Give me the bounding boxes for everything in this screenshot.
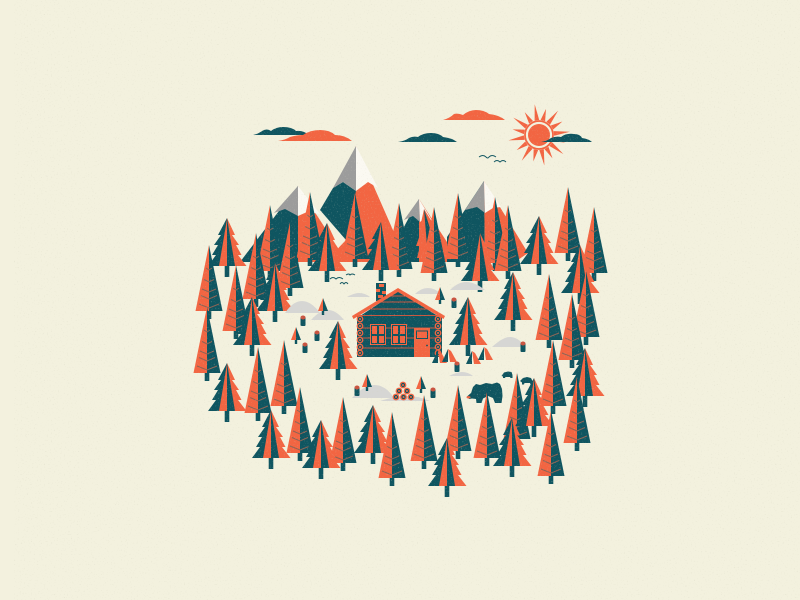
tree: fir [566,348,604,407]
bear cub [502,372,512,378]
mountain: small right [385,199,460,262]
cloud: orange left [278,130,352,141]
chimney [376,283,386,301]
tree: pine [378,412,406,486]
mountain: tall centre [320,146,407,262]
tree: fir [494,272,532,331]
tree: fir [319,321,358,380]
small tree [362,374,372,391]
mountains [240,146,528,262]
tree: pine [504,373,530,447]
tree: fir [561,245,600,304]
tree: pine [580,207,608,281]
tree: pine [410,395,438,469]
sun [508,104,570,166]
snow mound [415,288,441,294]
snow mound [352,385,394,398]
tree: fir [354,405,392,464]
tree: pine [194,307,220,381]
tree: pine [494,205,522,279]
tree: pine [482,197,508,271]
tree: jagged behind pine [416,209,434,258]
snow mound [285,301,320,313]
tree: pine [276,222,304,296]
tree: pine [558,294,586,368]
stump [430,388,436,398]
stump [520,342,526,352]
snow mound [450,282,485,290]
tree: pine [444,193,472,267]
tree: pine [386,203,412,277]
tree: pine [474,392,500,466]
log lines [357,296,441,348]
stump [452,298,456,308]
snow mound [449,372,473,376]
birds upper right [479,156,506,162]
small tree [291,327,301,344]
tree: pine [330,397,356,471]
tree: fir [256,263,294,322]
tree: pine [242,233,270,307]
birds near cabin [330,274,355,284]
tree: fir [461,233,500,292]
tree: fir [308,223,346,282]
stump [454,362,460,372]
mountain: left [240,186,347,262]
tree: pine [342,193,368,267]
small tree [318,298,328,315]
tree: fir [493,418,532,477]
window right [391,324,407,345]
tree: fir [428,438,466,497]
small fir cluster [432,347,493,364]
log cabin [352,283,445,357]
tree: pine [286,387,314,461]
tree: fir [449,297,488,356]
tree: fir [515,378,554,437]
roof [352,288,445,319]
tree: pine [554,187,582,261]
tree: pine [420,207,448,281]
tree: fir [233,297,272,356]
tree: fir [302,420,340,479]
tree: fir [208,218,246,277]
small tree [435,287,445,304]
tree: pine [540,340,566,414]
tree: pine [444,385,472,459]
snow mound [492,337,526,347]
tree: fir [208,363,246,422]
stump [302,342,308,353]
cloud: dark top-left [253,127,309,135]
tree: fir [520,216,558,275]
bear cub [520,377,532,384]
tree: pine [270,340,298,414]
tree: pine [196,245,222,319]
small tree [416,376,426,393]
roof gable [357,291,441,318]
snow mound [347,293,370,297]
snow mound [311,310,344,320]
tree: pine [536,274,562,348]
stump [300,316,306,326]
mountain: right [447,181,528,262]
snow mound [380,396,430,401]
cloud: dark centre [398,133,457,142]
tree: pine [296,192,324,266]
log ends [357,316,441,356]
cloud: orange centre [443,110,505,120]
cloud: dark over sun [541,134,592,142]
stump [314,330,320,341]
tree: fir [362,222,400,281]
door [414,328,430,357]
window left [370,324,386,345]
tree: pine [256,205,284,279]
bear [466,382,502,403]
tree: pine [564,377,590,451]
tree: pine [222,265,250,339]
tree: pine [572,271,600,345]
tree: pine [538,410,564,484]
cabin wall [357,316,442,357]
tree: fir [252,410,290,469]
log pile [393,382,414,400]
stump [354,386,360,396]
tree: pine [244,347,272,421]
